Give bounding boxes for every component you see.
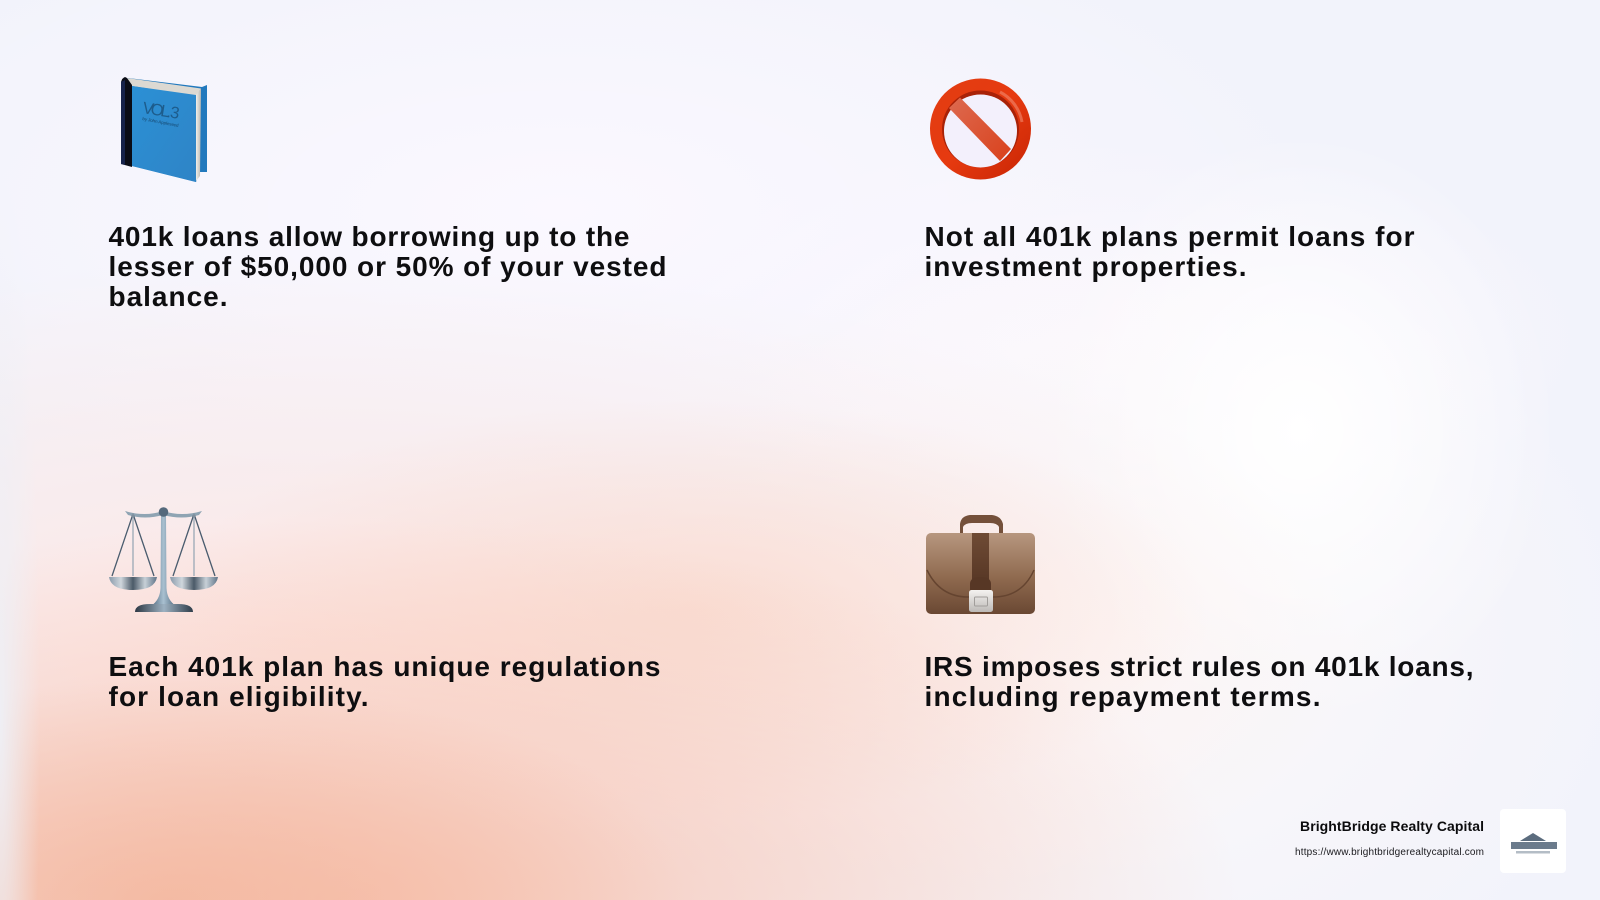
text: irs rules: IRS imposes strict rules on 401k loans, — [924, 651, 1474, 682]
text: irs rules — [924, 651, 1474, 712]
text: plan regulations — [108, 651, 660, 712]
text: plan permission: Not all 401k plans permit loans for — [924, 221, 1415, 252]
text: loan limit — [108, 221, 666, 312]
icon: prohibited sign — [930, 78, 1031, 180]
text: loan limit: lesser of $50,000 or 50% of your vested — [108, 251, 666, 282]
brand url: https://www.brightbridgerealtycapital.com — [1295, 847, 1484, 858]
icon: blue book: by John Appleseed — [142, 116, 179, 128]
brand name: BrightBridge Realty Capital — [1300, 818, 1484, 834]
text: loan limit: 401k loans allow borrowing up to the — [108, 221, 630, 252]
text: plan regulations: for loan eligibility. — [108, 681, 368, 712]
panel: plan permission — [924, 78, 1415, 282]
text: plan permission: investment properties. — [924, 251, 1246, 282]
panel: irs rules — [924, 515, 1474, 712]
icon: balance scale — [109, 507, 218, 612]
logo tile — [1500, 809, 1566, 873]
panel: loan limit — [108, 77, 666, 312]
icon: blue book — [121, 77, 207, 182]
text: irs rules: including repayment terms. — [924, 681, 1320, 712]
footer brand — [1295, 809, 1566, 873]
text: plan permission — [924, 221, 1415, 282]
icon: briefcase — [926, 515, 1035, 614]
panel: plan regulations — [108, 507, 660, 712]
icon: blue book: VOL. 3 — [141, 99, 181, 123]
text: loan limit: balance. — [108, 281, 228, 312]
text: plan regulations: Each 401k plan has unique regulations — [108, 651, 660, 682]
